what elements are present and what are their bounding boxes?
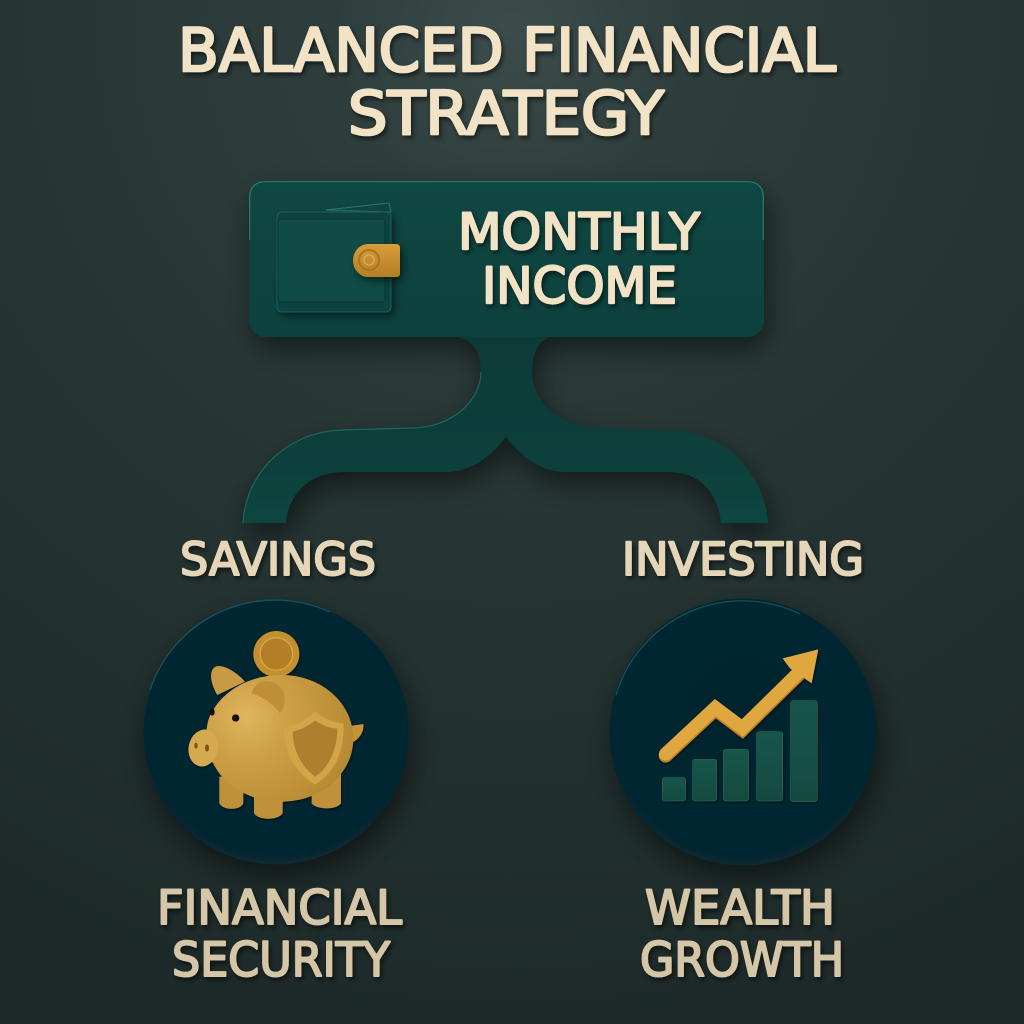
feet: [219, 773, 341, 819]
arrow: [666, 649, 818, 756]
bar chart: [662, 701, 817, 802]
pig body: [206, 675, 353, 802]
panel label: monthly income: [458, 203, 700, 315]
icon: rising chart: [662, 649, 818, 802]
heading: investing: INVESTING: [622, 533, 864, 586]
icon: wallet: [277, 203, 400, 312]
shield: [284, 712, 343, 784]
eyes: [210, 708, 239, 722]
back ear: [211, 666, 245, 695]
panel: monthly income: [249, 181, 764, 337]
disc: investing: [610, 598, 876, 866]
outcome label: wealth growth: GROWTH: [640, 933, 844, 988]
title: BALANCED FINANCIAL: [178, 16, 837, 86]
outcome label: wealth growth: WEALTH: [645, 881, 835, 936]
disc: savings: [144, 600, 408, 864]
outcome label: financial security: SECURITY: [172, 933, 390, 988]
title: [178, 16, 837, 149]
wallet clasp: [353, 244, 400, 277]
outcome label: financial security: [157, 881, 402, 988]
panel label: monthly income: MONTHLY: [458, 203, 700, 261]
heading: savings: SAVINGS: [180, 533, 376, 586]
connector: income splits into savings and investing: [243, 181, 768, 523]
tail: [350, 724, 363, 743]
icon: piggy bank with coin and shield: [185, 631, 363, 819]
snout: [185, 727, 222, 769]
front ear: [252, 681, 285, 713]
outcome label: financial security: FINANCIAL: [157, 881, 402, 936]
panel label: monthly income: INCOME: [482, 257, 677, 315]
outcome label: wealth growth: [640, 881, 844, 988]
coin: [253, 631, 299, 677]
title: STRATEGY: [348, 79, 664, 149]
